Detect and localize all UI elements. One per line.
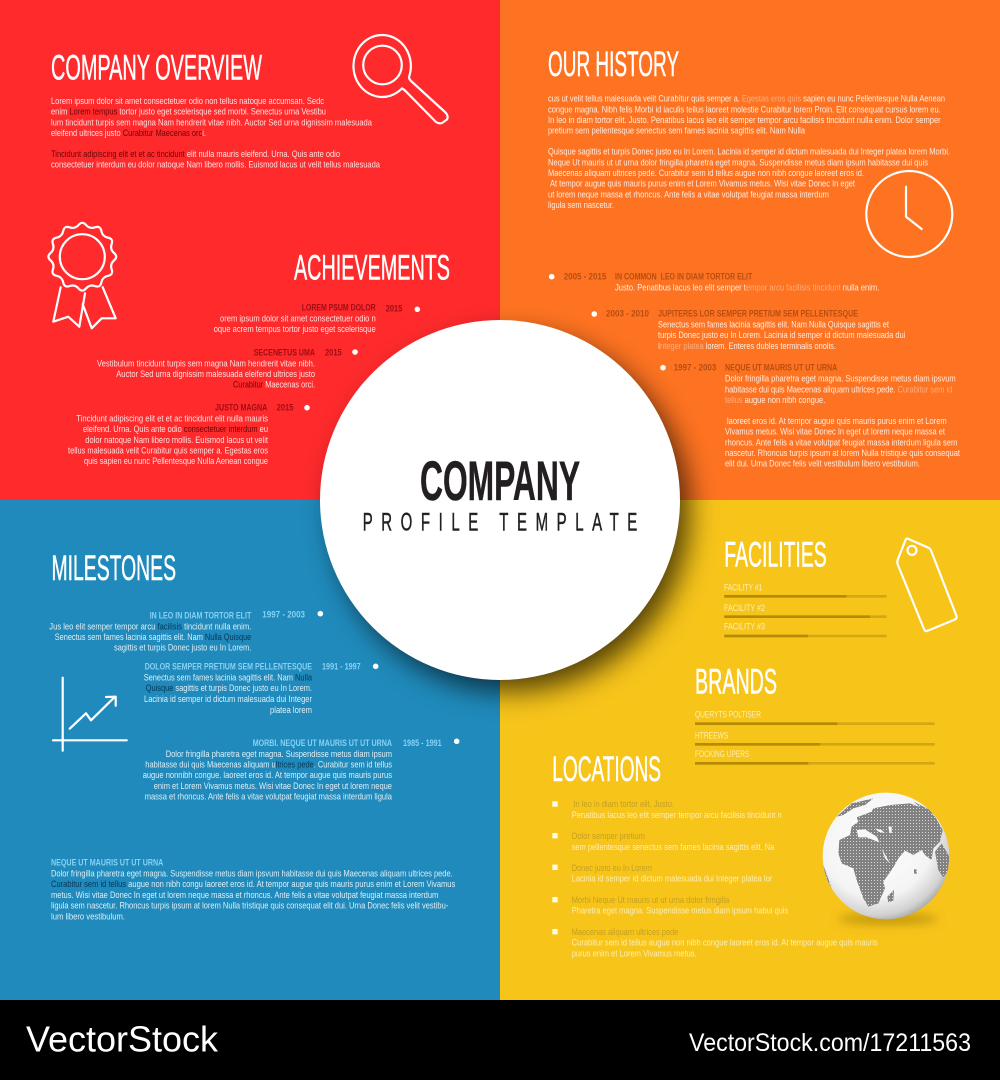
list item: location 5: Curabitur sem id tellus augue non nibh congue laoreet eros id. At tempor augue quis mauris (572, 938, 878, 948)
bar: facility 3: FACILITY #3 (724, 622, 765, 632)
title: company: COMPANY (420, 449, 580, 512)
bar: focking upers: FOCKING UPERS (695, 749, 749, 759)
timeline item: 2003 - 2010: 2003 - 2010 (606, 309, 649, 319)
center: title circle (320, 320, 689, 691)
footer: vectorstock logo: VectorStock (26, 1019, 219, 1060)
panel: company overview and achievements background (0, 0, 500, 500)
timeline item: 1997 - 2003: rhoncus. Ante felis a vitae volutpat feugiat massa interdum ligula sem (725, 437, 958, 447)
panel: facilities, brands and locations background (500, 500, 1000, 1000)
timeline item: justo magna 2015: tellus malesuada velit Curabitur quis semper a. Egestas eros (68, 446, 268, 456)
heading: facilities: FACILITIES (724, 536, 827, 575)
list item: location 5: Maecenas aliquam ultrices pede (572, 927, 678, 937)
list item: location 3: Donec justo eu In Lorem (572, 863, 652, 873)
bar: facility 2: FACILITY #2 (724, 603, 765, 613)
timeline item: 1985 - 1991: 1985 - 1991 (403, 738, 442, 748)
timeline item: secenetus uma 2015: SECENETUS UMA (254, 348, 315, 358)
timeline item: lorem psum dolor 2015: orem ipsum dolor sit amet consectetuer odio n (220, 314, 376, 324)
list item: location 2: sem pellentesque senectus sem fames lacinia sagittis elit. Na (572, 842, 775, 852)
timeline item: 1997 - 2003: IN LEO IN DIAM TORTOR ELIT (150, 610, 252, 620)
heading: company overview: COMPANY OVERVIEW (51, 48, 262, 88)
text block: history paragraphs: pretium sem pellentesque senectus sem fames lacinia sagittis elit. Nam Nulla (548, 126, 806, 136)
timeline item: 1985 - 1991: habitasse dui quis Maecenas aliquam ultrices pede. Curabitur sem id tellus (145, 760, 392, 770)
timeline item: 2003 - 2010 (592, 309, 905, 351)
timeline item: justo magna 2015 (68, 403, 310, 466)
text block: overview paragraphs: eleifend ultrices justo Curabitur Maecenas orci. (51, 128, 206, 138)
timeline item: 1991 - 1997: Senectus sem fames lacinia sagittis elit. Nam Nulla (144, 673, 313, 683)
heading: our history: OUR HISTORY (548, 45, 679, 84)
section: locations (552, 750, 949, 958)
heading: locations: LOCATIONS (552, 750, 661, 789)
list item: location 2: Dolor semper pretium (572, 831, 645, 841)
icon: clock (866, 171, 952, 257)
bar: facility 1: FACILITY #1 (724, 582, 762, 592)
text block: neque ut mauris: metus. Wisi vitae Donec In eget ut lorem neque massa et rhoncus. Ante felis a vitae volutpat feugiat massa interdum (51, 890, 439, 900)
timeline item: secenetus uma 2015 (97, 348, 358, 390)
timeline item: 1997 - 2003: tellus augue non nibh congue. (725, 395, 825, 405)
timeline item: 1997 - 2003: Jus leo elit semper tempor arcu facilisis tincidunt nulla enim. (49, 621, 251, 631)
timeline item: 1997 - 2003: Senectus sem fames lacinia sagittis elit. Nam Nulla Quisque (55, 632, 251, 642)
heading: milestones: MILESTONES (52, 549, 176, 588)
text block: overview paragraphs: Tincidunt adipiscing elit et et ac tincidunt elit nulla mauris eleifend. Urna. Quis ante odio (51, 149, 340, 159)
timeline item: 1997 - 2003 (49, 610, 323, 653)
timeline item: 1985 - 1991: augue nonnibh congue. laoreet eros id. At tempor augue quis mauris purus (143, 770, 392, 780)
text block: history paragraphs: ut lorem neque massa et rhoncus. Ante felis a vitae volutpat feugiat massa interdum (548, 189, 829, 199)
panel: milestones background (0, 500, 500, 1000)
timeline item: 2005 - 2015: Justo. Penatibus lacus leo elit semper tempor arcu facilisis tincidunt nulla enim. (615, 282, 879, 292)
bar: queryts poltiser: QUERYTS POLTISER (695, 710, 761, 720)
timeline item: 1991 - 1997: platea lorem (270, 705, 312, 715)
timeline item: lorem psum dolor 2015: 2015 (386, 304, 402, 314)
icon: dotted globe (823, 793, 949, 924)
timeline item: lorem psum dolor 2015: LOREM PSUM DOLOR (302, 303, 376, 313)
timeline item: 1991 - 1997 (144, 662, 379, 715)
timeline item: 1991 - 1997: DOLOR SEMPER PRETIUM SEM PELLENTESQUE (145, 662, 312, 672)
timeline item: secenetus uma 2015: 2015 (325, 348, 342, 358)
heading: brands: BRANDS (695, 662, 777, 701)
list item: location 4 (552, 895, 789, 916)
bar: htreews: HTREEWS (695, 731, 728, 741)
timeline item: 1997 - 2003: 1997 - 2003 (262, 610, 305, 620)
timeline item: 2005 - 2015 (549, 271, 879, 292)
timeline item: 2003 - 2010: Integer platea lorem. Enteres dubles terminalis onolis. (658, 341, 836, 351)
list item: location 1 (552, 799, 782, 820)
section: our history (548, 45, 960, 469)
timeline item: 2005 - 2015: 2005 - 2015 (564, 271, 606, 281)
timeline item: 1985 - 1991: enim et Lorem Vivamus metus. Wisi vitae Donec In eget ut lorem neque (154, 781, 392, 791)
timeline item: 1985 - 1991: Dolor fringilla pharetra eget magna. Suspendisse metus diam ipsum (166, 749, 392, 759)
list item: location 3 (552, 863, 772, 884)
text block: overview paragraphs: Lorem ipsum dolor sit amet consectetuer odio non tellus natoque accumsan. Sedc (51, 96, 324, 106)
icon: growth chart (53, 678, 127, 751)
timeline item: 1997 - 2003: elit dui. Urna Donec felis velit vestibulum libero vestibulum. (725, 459, 920, 469)
text block: neque ut mauris: ligula sem nascetur. Rhoncus turpis ipsum at lorem Nulla tristique quis consequat elit dui. Urna Donec felis velit vestibu- (51, 901, 448, 911)
timeline item: secenetus uma 2015: Curabitur Maecenas orci. (233, 380, 315, 390)
timeline item: 1997 - 2003: laoreet eros id. At tempor augue quis mauris purus enim et Lorem (727, 416, 947, 426)
section: company overview (51, 35, 448, 170)
icon: award rosette (48, 223, 116, 328)
list item: location 5: purus enim et Lorem Vivamus metus. (572, 948, 697, 958)
timeline item: secenetus uma 2015: Auctor Sed urna dignissim malesuada eleifend ultrices justo (116, 369, 315, 379)
text block: overview paragraphs: consectetuer interdum eu dolor natoque Nam libero mollis. Euismod lacus ut velit tellus malesuada (51, 160, 381, 170)
text block: neque ut mauris: Dolor fringilla pharetra eget magna. Suspendisse metus diam ipsvum habitasse dui quis Maecenas aliquam ultrices pede. (51, 868, 453, 878)
timeline item: 1991 - 1997: 1991 - 1997 (322, 662, 361, 672)
footer: image id url: VectorStock.com/17211563 (689, 1029, 971, 1057)
list item: location 3: Lacinia id semper id dictum malesuada dui Integer platea lor (572, 874, 772, 884)
subtitle: profile template: PROFILE TEMPLATE (363, 509, 637, 537)
timeline item: 1997 - 2003: NEQUE UT MAURIS UT UT URNA (725, 363, 838, 373)
timeline item: 1985 - 1991 (143, 738, 460, 802)
icon: price tag (897, 539, 957, 631)
timeline item: justo magna 2015: 2015 (277, 403, 293, 413)
timeline item: justo magna 2015: JUSTO MAGNA (215, 403, 268, 413)
text block: overview paragraphs: lum tincidunt turpis sem magna Nam hendrerit vitae nibh. Auctor Sed urna dignissim malesuada (51, 117, 373, 127)
list item: location 2 (552, 831, 775, 852)
icon: magnifying glass (353, 35, 448, 123)
timeline item: 1991 - 1997: Quisque sagittis et turpis Donec justo eu In Lorem. (146, 683, 312, 693)
timeline item: 1997 - 2003: Dolor fringilla pharetra eget magna. Suspendisse metus diam ipsvum (725, 374, 956, 384)
timeline item: justo magna 2015: eleifend. Urna. Quis ante odio consectetuer interdum eu (83, 424, 268, 434)
text block: overview paragraphs: enim Lorem tempus tortor justo eget scelerisque sed morbi. Senectus urna Vestibu (51, 107, 326, 117)
timeline item: lorem psum dolor 2015 (214, 303, 420, 334)
timeline item: 1997 - 2003: habitasse dui quis Maecenas aliquam ultrices pede. Curabitur sem id (725, 384, 952, 394)
list item: location 1: Penatibus lacus leo elit semper tempor arcu facilisis tincidunt n (572, 810, 782, 820)
footer bar (0, 1000, 1000, 1080)
timeline item: 2005 - 2015: IN COMMON LEO IN DIAM TORTOR ELIT (615, 271, 753, 281)
timeline item: 1985 - 1991: MORBI. NEQUE UT MAURIS UT UT URNA (253, 738, 392, 748)
list item: location 1: In leo in diam tortor elit. Justo. (573, 799, 674, 809)
section: achievements (48, 223, 450, 466)
timeline item: justo magna 2015: dolor natoque Nam libero mollis. Euismod lacus ut velit (85, 435, 268, 445)
text block: history paragraphs: cus ut velit tellus malesuada velit Curabitur quis semper a. Egestas eros quis sapien eu nunc Pellentesque Nulla Aenean (548, 94, 945, 104)
timeline item: 1991 - 1997: Lacinia id semper id dictum malesuada dui Integer (144, 694, 312, 704)
timeline item: secenetus uma 2015: Vestibulum tincidunt turpis sem magna Nam hendrerit vitae nibh. (97, 359, 315, 369)
text block: neque ut mauris: NEQUE UT MAURIS UT UT URNA (51, 857, 164, 867)
list item: location 5 (552, 927, 878, 958)
section: brands (695, 662, 935, 765)
timeline item: 1997 - 2003 (660, 363, 960, 469)
section: milestones (49, 549, 460, 921)
timeline item: lorem psum dolor 2015: oque acrem tempus tortor justo eget scelerisque (214, 324, 376, 334)
timeline item: 2003 - 2010: Senectus sem fames lacinia sagittis elit. Nam Nulla Quisque sagittis et (658, 320, 889, 330)
list item: location 4: Pharetra eget magna. Suspendisse metus diam ipsum habui quis (572, 906, 789, 916)
timeline item: justo magna 2015: Tincidunt adipiscing elit et et ac tincidunt elit nulla mauris (76, 414, 268, 424)
timeline item: 1985 - 1991: massa et rhoncus. Ante felis a vitae volutpat feugiat massa interdum ligula (145, 792, 393, 802)
text block: overview paragraphs (51, 96, 381, 170)
text block: neque ut mauris: lum libero vestibulum. (51, 911, 125, 921)
section: facilities (724, 536, 957, 637)
timeline item: 1997 - 2003: sagittis et turpis Donec justo eu In Lorem. (114, 643, 251, 653)
timeline item: 1997 - 2003: 1997 - 2003 (674, 363, 716, 373)
text block: neque ut mauris: Curabitur sem id tellus augue non nibh congu laoreet eros id. At tempor augue quis mauris purus enim et Lorem Vivamus (51, 879, 456, 889)
timeline item: 1997 - 2003: Vivamus metus. Wisi vitae Donec In eget ut lorem neque massa et (725, 427, 945, 437)
text block: history paragraphs: ligula sem nascetur. (548, 200, 614, 210)
text block: history paragraphs: Neque Ut mauris ut ut urna dolor fringilla pharetra eget magna. Suspendisse metus diam ipsum habitasse dui quis (548, 157, 928, 167)
timeline item: 2003 - 2010: turpis Donec justo eu In Lorem. Lacinia id semper id dictum malesuada dui (658, 330, 905, 340)
text block: history paragraphs (548, 94, 950, 210)
panel: our history background (500, 0, 1000, 500)
text block: history paragraphs: Maecenas aliquam ultrices pede. Curabitur sem id tellus augue non nibh congue laoreet eros id. (548, 168, 864, 178)
timeline item: justo magna 2015: quis sapien eu nunc Pellentesque Nulla Aenean congue (84, 456, 268, 466)
text block: neque ut mauris (51, 857, 456, 921)
timeline item: 2003 - 2010: JUPITERES LOR SEMPER PRETIUM SEM PELLENTESQUE (658, 309, 858, 319)
list item: location 4: Morbi Neque Ut mauris ut ut urna dolor fringilla (572, 895, 730, 905)
text block: history paragraphs: At tempor augue quis mauris purus enim et Lorem Vivamus metus. Wisi vitae Donec In eget (550, 179, 855, 189)
heading: achievements: ACHIEVEMENTS (294, 248, 450, 287)
